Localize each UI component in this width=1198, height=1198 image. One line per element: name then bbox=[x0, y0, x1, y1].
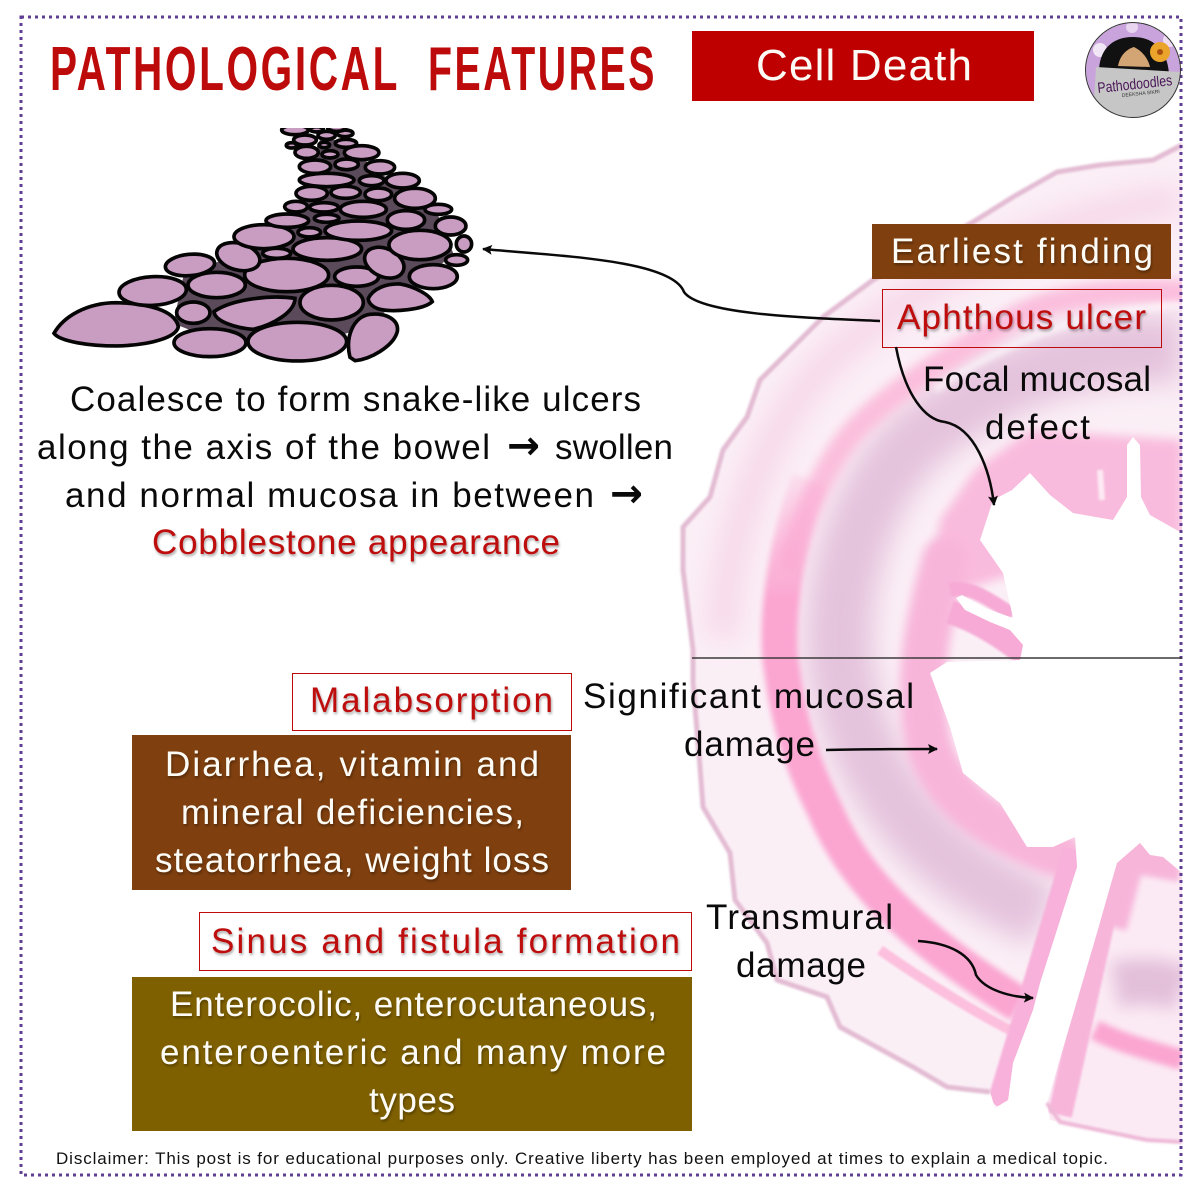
label: Sinus and fistula formation bbox=[200, 912, 692, 970]
label: Aphthous ulcer: Aphthous ulcer bbox=[897, 298, 1146, 337]
label: Sinus and fistula formation: Sinus and fistula formation bbox=[211, 922, 680, 961]
text block: cobblestone explanation: → bbox=[610, 471, 643, 517]
panel: fistula types: types bbox=[369, 1081, 455, 1120]
label: Aphthous ulcer bbox=[882, 290, 1162, 348]
text: transmural damage: damage bbox=[736, 946, 866, 985]
text block: cobblestone explanation: swollen bbox=[555, 428, 673, 467]
panel: malabsorption details: Diarrhea, vitamin and bbox=[165, 745, 539, 784]
logo: Pathodoodles badge bbox=[1085, 21, 1181, 120]
panel: malabsorption details: mineral deficiencies, bbox=[181, 793, 524, 832]
title: PATHOLOGICAL bbox=[50, 35, 400, 104]
panel: fistula types: enteroenteric and many more bbox=[160, 1033, 666, 1072]
heading badge: Cell Death: Cell Death bbox=[756, 41, 972, 90]
text: focal mucosal defect: Focal mucosal bbox=[923, 360, 1151, 399]
logo: Pathodoodles badge: Pathodoodles bbox=[1097, 72, 1173, 97]
text block: cobblestone explanation: and normal mucosa in between bbox=[65, 476, 594, 515]
text: transmural damage bbox=[706, 898, 893, 985]
disclaimer: Disclaimer: This post is for educational purposes only. Creative liberty has been employed at times to explain a medical topic. bbox=[56, 1149, 1108, 1168]
label: Malabsorption: Malabsorption bbox=[310, 681, 553, 720]
text: transmural damage: Transmural bbox=[706, 898, 893, 937]
label: Malabsorption bbox=[292, 674, 572, 730]
text block: cobblestone explanation: along the axis of the bowel bbox=[37, 428, 490, 467]
panel: malabsorption details bbox=[132, 735, 571, 890]
title: FEATURES bbox=[428, 35, 657, 104]
label: Earliest finding bbox=[872, 224, 1171, 279]
tissue illustration: bowel wall cross-section bbox=[670, 130, 1182, 1145]
text block: cobblestone explanation: → bbox=[507, 423, 540, 469]
logo: Pathodoodles badge: DEEKSHA SIKRI bbox=[1122, 89, 1160, 99]
label: Earliest finding: Earliest finding bbox=[891, 232, 1153, 271]
right segment lower outline bbox=[1047, 1103, 1182, 1142]
text block: cobblestone explanation: Cobblestone appearance bbox=[152, 523, 560, 562]
text: significant mucosal damage: damage bbox=[684, 725, 815, 764]
arrow: aphthous ulcer to cobblestone bbox=[483, 249, 880, 321]
heading badge: Cell Death bbox=[692, 31, 1034, 101]
text block: cobblestone explanation: Coalesce to form snake-like ulcers bbox=[70, 380, 641, 419]
arrow: significant mucosal damage bbox=[826, 749, 937, 750]
illustration: cobblestone mucosa bbox=[54, 125, 472, 361]
text: focal mucosal defect bbox=[923, 360, 1151, 447]
text: significant mucosal damage: Significant mucosal bbox=[583, 677, 914, 716]
tissue outline, left wall bbox=[683, 145, 1182, 1092]
text block: cobblestone explanation bbox=[37, 380, 673, 562]
text: focal mucosal defect: defect bbox=[985, 408, 1090, 447]
panel: fistula types bbox=[132, 977, 692, 1131]
right bowel segment bbox=[1040, 840, 1182, 1145]
panel: fistula types: Enterocolic, enterocutaneous, bbox=[170, 985, 657, 1024]
text: significant mucosal damage bbox=[583, 677, 914, 764]
upper and left bowel wall bbox=[670, 130, 1182, 1120]
divider line across tissue bbox=[692, 657, 1182, 659]
arrow: transmural damage bbox=[918, 941, 1033, 998]
arrow: aphthous ulcer to mucosal defect bbox=[896, 347, 994, 505]
panel: malabsorption details: steatorrhea, weight loss bbox=[155, 841, 549, 880]
